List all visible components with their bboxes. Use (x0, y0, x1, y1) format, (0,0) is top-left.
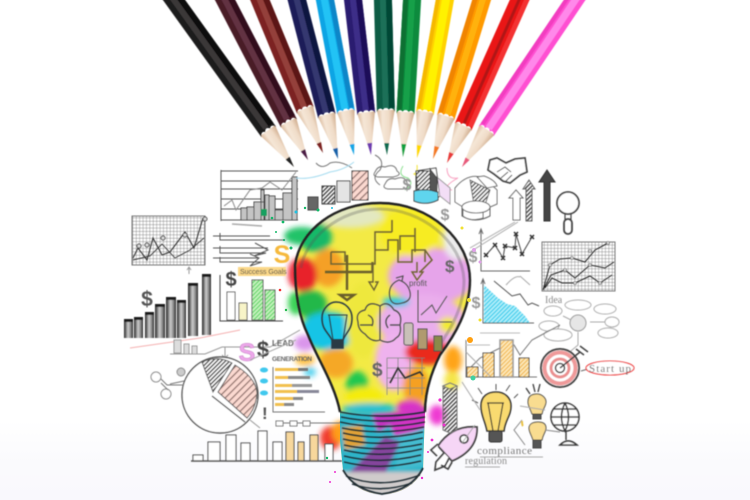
inner cylinders (404, 323, 442, 351)
small bulb icon, upper (526, 384, 546, 419)
target with arrow icon (541, 346, 588, 387)
paint specks (271, 207, 482, 483)
flow boxes (276, 421, 340, 426)
handshake icon (488, 158, 527, 183)
coloured squiggles under pencil tips (296, 162, 458, 190)
dollar signs near top of bulb (403, 177, 481, 312)
dollar signs near top of bulb: $ (403, 177, 412, 194)
sketch charts and icons (124, 155, 634, 470)
light bulb (290, 200, 476, 500)
line and bar chart, top left (221, 170, 298, 226)
pencil: sky blue (312, 0, 363, 157)
idea mind map: Idea (545, 295, 563, 306)
pie cylinder (455, 176, 497, 220)
3D bars above bulb (308, 171, 368, 210)
dollar sign inside: $ (445, 257, 455, 276)
dollar signs near top of bulb: $ (472, 295, 481, 312)
orange bar chart with question marks (465, 325, 560, 377)
bulb colour fill (290, 200, 476, 500)
3D cylinder bar chart with dollar sign (124, 274, 211, 338)
magnifying glass icon (557, 192, 579, 234)
dollar signs near top of bulb: $ (469, 249, 478, 266)
yellow light bulb icon (472, 384, 518, 442)
inner line chart (418, 290, 452, 322)
bar chart with dollar sign and label (220, 241, 290, 321)
small cylinders and arrow (170, 330, 300, 358)
rocket icon (431, 427, 477, 470)
money bag (389, 276, 410, 304)
cyan cup 3D chart (414, 168, 450, 204)
grid line chart, left (132, 216, 207, 274)
pencil: dark green (374, 0, 396, 155)
compliance regulation text: regulation (465, 456, 507, 467)
start up label: Start up (589, 363, 632, 375)
globe icon (551, 403, 579, 445)
3D gray bar near bulb (443, 383, 457, 433)
three rising arrows (509, 170, 555, 221)
bulb interior doodles (322, 220, 455, 395)
connector lines around bulb (250, 222, 545, 443)
pencil: dark brown (194, 0, 316, 164)
pencil: purple (341, 0, 380, 156)
bar chart with dollar sign and label: $ (225, 269, 237, 291)
pencil: pink (455, 0, 604, 172)
lead generation block: $ (257, 337, 269, 362)
3D cylinder bar chart with dollar sign: $ (141, 288, 153, 311)
bar chart with dollar sign and label: S (274, 241, 290, 269)
pencil: black (135, 0, 301, 172)
idea mind map (539, 295, 619, 360)
lead generation block: LEAD (272, 339, 294, 348)
inner grid and zigzag (387, 358, 425, 395)
pencil: yellow (408, 0, 457, 160)
profit label: profit (409, 279, 428, 288)
bar chart with dollar sign and label: Success Goals (240, 269, 287, 276)
maze pipes (325, 220, 432, 300)
lead generation block: GENERATION (272, 356, 312, 363)
red sketch line (130, 330, 240, 348)
paint splashes behind bulb (284, 227, 462, 450)
pencil: orange (424, 0, 497, 162)
falling area chart (481, 276, 539, 323)
scatter line chart (470, 222, 534, 271)
pencil: red brown (238, 0, 331, 156)
pencil: red (439, 0, 537, 167)
lead generation block: ! (262, 404, 268, 423)
inner bulb icon (322, 302, 352, 348)
pencil: green (394, 0, 422, 158)
bulb outline (295, 203, 470, 412)
lead generation block: S (239, 339, 255, 367)
brain outline (357, 304, 401, 342)
bulb rim sketch shading (301, 209, 464, 350)
dollar signs near top of bulb: $ (441, 207, 450, 224)
pie chart with callout circles (151, 357, 260, 433)
dollar sign lower: $ (372, 360, 383, 381)
bulb base colours (340, 405, 425, 494)
cloud doodles (316, 155, 408, 189)
colored pencils fan (135, 0, 604, 172)
compliance regulation text: compliance (477, 445, 532, 457)
three outline arrows (213, 233, 285, 266)
screw base threads (340, 412, 425, 494)
grid multi-line chart, right (542, 242, 615, 291)
compliance regulation text (465, 445, 543, 467)
pencil: navy (282, 0, 347, 161)
small bulb icon, lower (514, 420, 560, 448)
lead generation block (239, 337, 325, 423)
bottom bar chart (191, 431, 342, 461)
